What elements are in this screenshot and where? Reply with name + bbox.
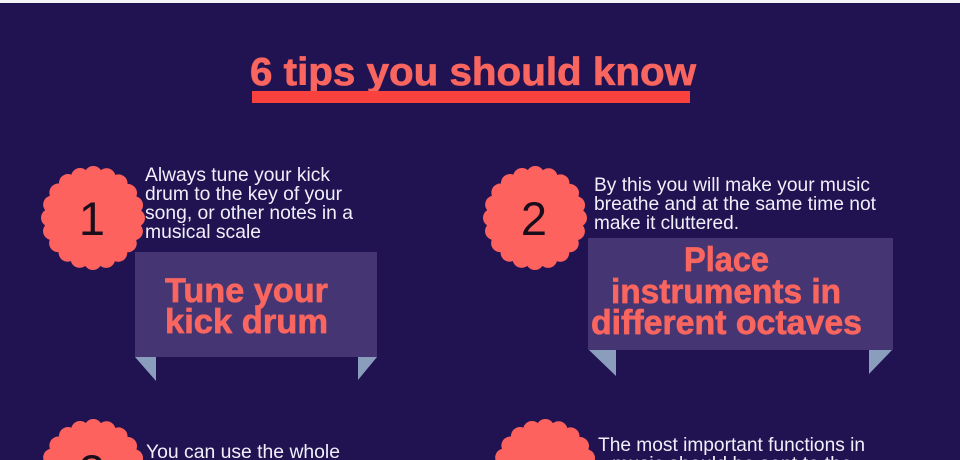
title: 6 tips you should know	[250, 51, 697, 94]
icon: number badge 3	[44, 422, 142, 460]
ribbon: Place instruments in different octaves: different octaves	[591, 304, 862, 342]
icon: number badge 4	[496, 422, 594, 460]
tip 4 text: The most important functions in	[598, 434, 865, 456]
ribbon: Place instruments in different octaves	[588, 238, 893, 376]
tip 2 text: By this you will make your music	[594, 174, 870, 196]
ribbon: Place instruments in different octaves: Place	[684, 241, 769, 279]
ribbon: Tune your kick drum: kick drum	[165, 303, 328, 341]
tip 1 text: Always tune your kick	[145, 164, 330, 186]
tip 2 text: make it cluttered.	[594, 212, 739, 234]
ribbon: Tune your kick drum	[135, 252, 377, 381]
tip 1 text: musical scale	[145, 221, 261, 243]
icon: number badge 1	[44, 170, 142, 266]
panel: tip 3	[44, 422, 340, 460]
tip 1 text: drum to the key of your	[145, 183, 343, 205]
panel: tip 2	[486, 170, 893, 376]
ribbon: Tune your kick drum: Tune your	[165, 272, 328, 310]
tip 1 text: song, or other notes in a	[145, 202, 353, 224]
panel: tip 1	[44, 164, 377, 381]
panel: tip 4	[496, 422, 870, 460]
tip 2 text: breathe and at the same time not	[594, 193, 877, 215]
icon: number badge 1: 1	[79, 192, 105, 245]
ribbon: Place instruments in different octaves: instruments in	[611, 273, 841, 311]
icon: number badge 2	[486, 170, 584, 266]
icon: number badge 2: 2	[521, 192, 547, 245]
